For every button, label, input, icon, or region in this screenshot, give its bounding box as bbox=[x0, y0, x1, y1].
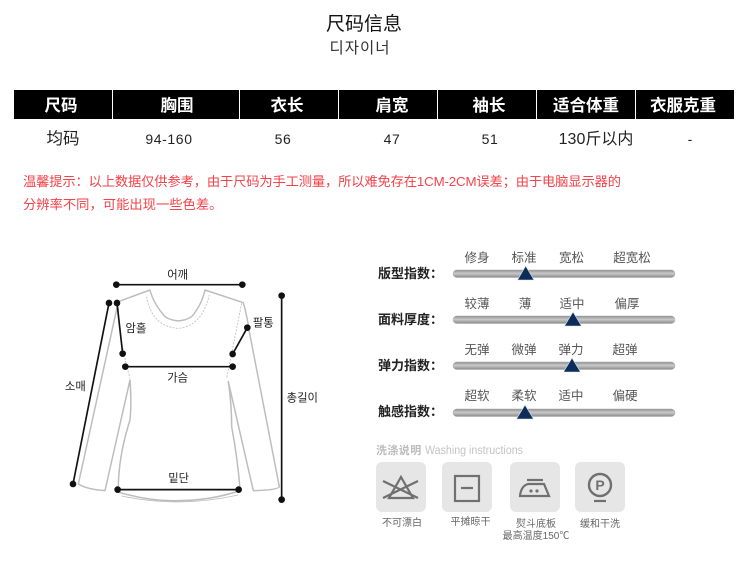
diagram labels: 총길이 bbox=[287, 391, 318, 404]
icon: gentle dry clean: 缓和干洗 bbox=[580, 517, 620, 530]
garment measurement diagram bbox=[65, 269, 318, 502]
warm tip note bbox=[23, 173, 621, 212]
table row: 均码 bbox=[46, 129, 80, 148]
index: touch: 适中 bbox=[558, 388, 584, 403]
warm tip note: 分辨率不同，可能出现一些色差。 bbox=[23, 196, 222, 212]
title: 尺码信息 bbox=[326, 13, 402, 35]
warm tip note: 温馨提示：以上数据仅供参考，由于尺码为手工测量，所以难免存在1CM-2CM误差；由于电脑显示器的 bbox=[23, 173, 621, 190]
table header: 衣长 bbox=[270, 95, 304, 115]
icon: no bleach: 不可漂白 bbox=[382, 516, 422, 529]
diagram labels bbox=[65, 269, 318, 485]
measure: armhole bbox=[114, 300, 125, 356]
table row: 51 bbox=[482, 131, 498, 147]
index: touch: 柔软 bbox=[511, 389, 537, 403]
index: thickness: 面料厚度： bbox=[378, 312, 443, 327]
icon: dry flat: 平摊晾干 bbox=[450, 515, 490, 528]
index: elasticity: 无弹 bbox=[464, 343, 490, 357]
subtitle: 디자이너 bbox=[329, 39, 391, 57]
measure: sleeve bbox=[70, 300, 111, 486]
index: fit: 标准 bbox=[511, 251, 537, 265]
icon: iron bbox=[503, 462, 569, 542]
diagram labels: 밑단 bbox=[168, 472, 190, 485]
table row bbox=[46, 129, 693, 148]
table row: 94-160 bbox=[145, 131, 193, 147]
icon: no bleach bbox=[376, 462, 426, 529]
index: touch bbox=[378, 388, 675, 419]
index: thickness: 薄 bbox=[519, 296, 531, 311]
table header: 肩宽 bbox=[376, 95, 408, 115]
icon: iron: 熨斗底板 bbox=[516, 517, 556, 530]
icon: gentle dry clean: P bbox=[595, 477, 605, 493]
diagram labels: 소매 bbox=[65, 380, 86, 393]
measure: chest bbox=[123, 364, 235, 369]
table row: 130斤以内 bbox=[559, 130, 633, 148]
index: thickness bbox=[378, 296, 675, 327]
washing heading bbox=[376, 443, 523, 457]
diagram labels: 가슴 bbox=[167, 371, 188, 384]
index: thickness: 偏厚 bbox=[614, 296, 640, 311]
index: fit: 修身 bbox=[464, 250, 490, 265]
measure: shoulder bbox=[114, 282, 245, 287]
index: elasticity: 微弹 bbox=[511, 343, 537, 357]
table row: - bbox=[688, 131, 693, 147]
index: elasticity: 弹力指数： bbox=[378, 358, 443, 373]
index: fit: 宽松 bbox=[559, 250, 584, 265]
diagram labels: 암홀 bbox=[126, 322, 146, 335]
icon: dry flat bbox=[442, 462, 492, 528]
diagram labels: 어깨 bbox=[167, 269, 188, 282]
index: thickness: 适中 bbox=[559, 296, 585, 311]
washing heading: Washing instructions bbox=[425, 445, 523, 457]
shirt outline bbox=[78, 290, 279, 502]
index: thickness: 较薄 bbox=[464, 296, 490, 311]
table header bbox=[14, 90, 734, 119]
table header: 衣服克重 bbox=[650, 95, 716, 115]
table header: 袖长 bbox=[472, 95, 506, 115]
index: touch: 超软 bbox=[464, 388, 490, 403]
table row: 47 bbox=[384, 131, 400, 147]
table header: 适合体重 bbox=[553, 95, 619, 115]
index: elasticity: 弹力 bbox=[558, 343, 584, 357]
measure: hem bbox=[115, 487, 241, 492]
index: touch: 偏硬 bbox=[612, 388, 638, 403]
table header: 尺码 bbox=[44, 96, 78, 115]
diagram labels: 팔통 bbox=[253, 316, 274, 330]
table header: 胸围 bbox=[160, 96, 194, 115]
washing heading: 洗涤说明 bbox=[376, 443, 422, 457]
index: fit: 版型指数： bbox=[378, 266, 443, 281]
size table bbox=[14, 90, 734, 148]
measure: total length bbox=[279, 293, 284, 502]
index: fit bbox=[378, 250, 675, 281]
icon: gentle dry clean bbox=[575, 462, 625, 530]
measure: upper arm bbox=[230, 325, 250, 356]
index: elasticity: 超弹 bbox=[612, 342, 638, 357]
index: fit: 超宽松 bbox=[613, 250, 651, 265]
index: elasticity bbox=[378, 342, 675, 373]
index: touch: 触感指数： bbox=[378, 404, 443, 419]
icon: iron: 最高温度150℃ bbox=[503, 529, 569, 542]
table row: 56 bbox=[275, 131, 291, 147]
